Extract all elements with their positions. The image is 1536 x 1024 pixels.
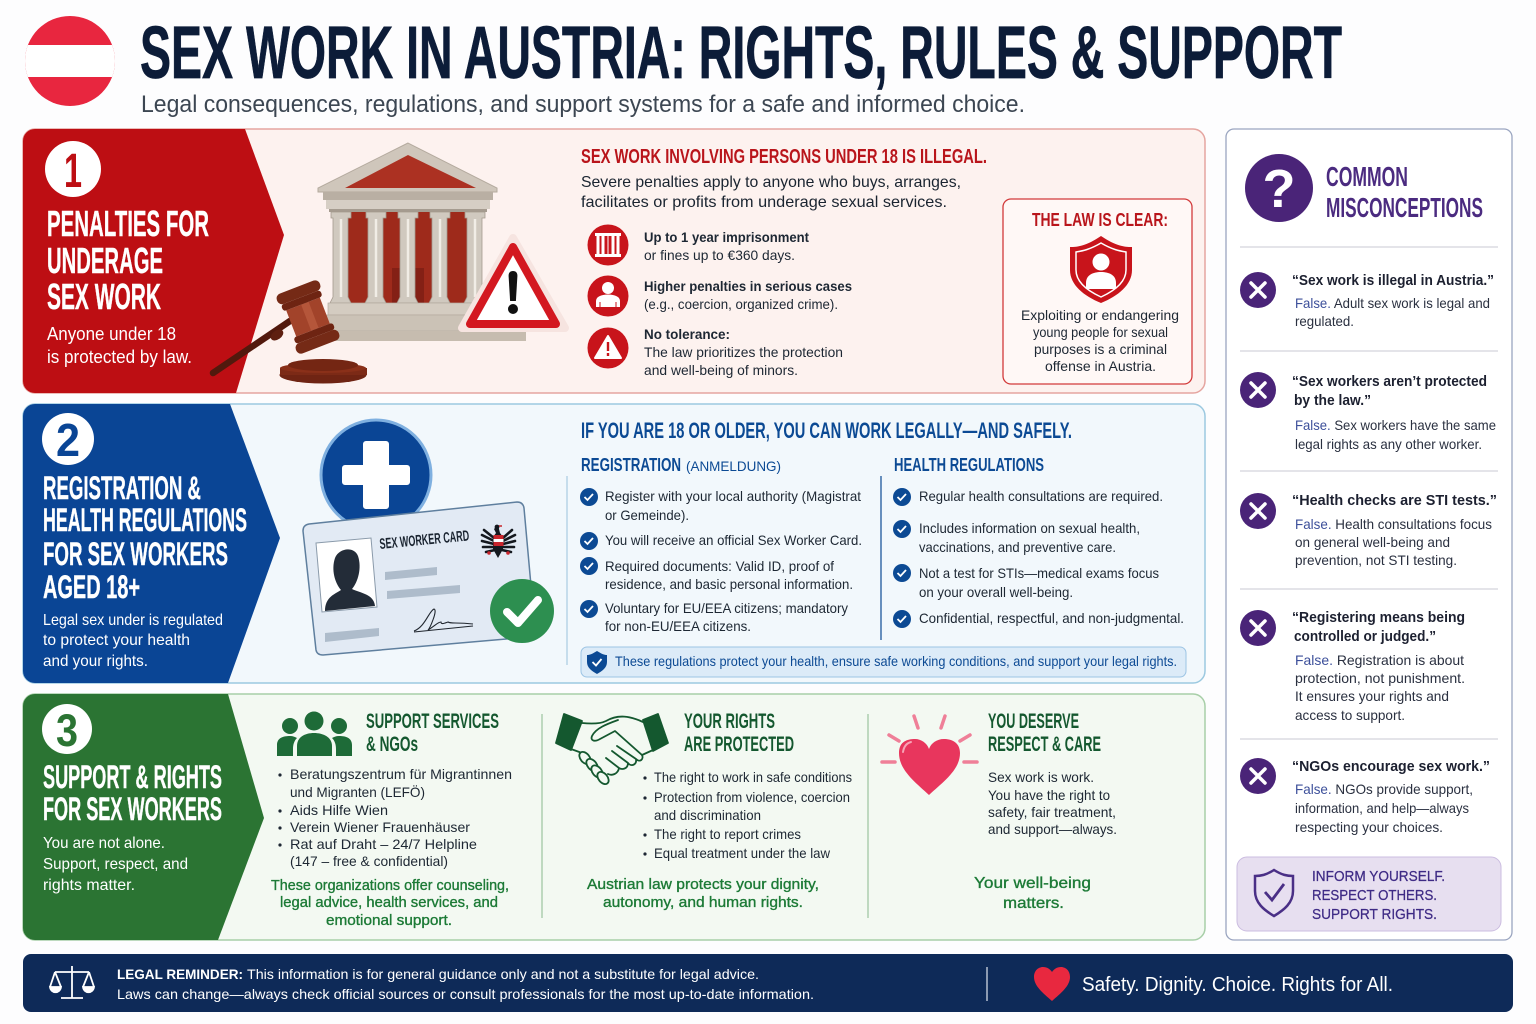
panel 3 heading: FOR SEX WORKERS bbox=[43, 791, 222, 827]
panel 1 heading: PENALTIES FOR bbox=[47, 203, 209, 244]
list: rights: The right to work in safe conditions bbox=[654, 769, 852, 785]
callout: inform yourself: SUPPORT RIGHTS. bbox=[1312, 906, 1437, 923]
respect heading: YOU DESERVE bbox=[988, 710, 1079, 733]
icon: warning triangle bbox=[462, 238, 565, 328]
legal reminder text: LEGAL REMINDER: bbox=[117, 966, 243, 982]
list: support services: Aids Hilfe Wien bbox=[290, 802, 388, 818]
list: health regulations: Regular health consultations are required. bbox=[919, 488, 1163, 504]
misconception 3 bbox=[1240, 492, 1497, 568]
list: registration: Register with your local authority (Magistrat bbox=[605, 488, 861, 504]
icon: scales of justice bbox=[50, 966, 94, 998]
support services note: legal advice, health services, and bbox=[280, 894, 498, 911]
misconception 1: regulated. bbox=[1295, 313, 1354, 329]
no tolerance text: The law prioritizes the protection bbox=[644, 344, 843, 360]
serious cases text: (e.g., coercion, organized crime). bbox=[644, 296, 838, 312]
misconception 5 bbox=[1240, 758, 1490, 835]
panel 1 subtext: is protected by law. bbox=[47, 347, 192, 367]
icon: handshake bbox=[556, 714, 668, 786]
legal reminder text: This information is for general guidance only and not a substitute for legal advice. bbox=[247, 966, 759, 982]
icon: person bbox=[588, 276, 628, 316]
illustration: courthouse bbox=[318, 143, 526, 341]
icon: gavel bbox=[213, 279, 367, 384]
respect text: Sex work is work. bbox=[988, 769, 1094, 785]
respect text: safety, fair treatment, bbox=[988, 804, 1116, 820]
legal reminder text: Laws can change—always check official sources or consult professionals for the most up-to-date information. bbox=[117, 986, 814, 1002]
list: registration: Required documents: Valid ID, proof of bbox=[605, 558, 834, 574]
list: rights: and discrimination bbox=[654, 807, 761, 823]
icon: shield with person bbox=[1070, 236, 1132, 303]
panel 3 heading bbox=[43, 759, 222, 827]
misconceptions heading bbox=[1326, 161, 1483, 223]
list: rights: The right to report crimes bbox=[654, 826, 801, 842]
misconception 4: False. Registration is about bbox=[1295, 652, 1464, 668]
callout: the law is clear: young people for sexual bbox=[1033, 324, 1168, 340]
list: registration: for non-EU/EEA citizens. bbox=[605, 618, 751, 634]
icon: question mark bbox=[1245, 154, 1313, 222]
icon: eagle bbox=[482, 525, 515, 558]
panel: penalties for underage sex work bbox=[23, 129, 1205, 393]
underage heading: SEX WORK INVOLVING PERSONS UNDER 18 IS ILLEGAL. bbox=[581, 146, 987, 168]
callout: inform yourself: INFORM YOURSELF. bbox=[1312, 868, 1445, 885]
list: support services: Beratungszentrum für Migrantinnen bbox=[290, 766, 512, 782]
rights heading bbox=[684, 710, 794, 756]
respect heading: RESPECT & CARE bbox=[988, 733, 1101, 756]
misconception 3: False. Health consultations focus bbox=[1295, 516, 1492, 532]
panel 3 subtext bbox=[43, 835, 188, 894]
panel 2 heading: REGISTRATION & bbox=[43, 470, 201, 506]
misconception 4: protection, not punishment. bbox=[1295, 670, 1465, 686]
panel: registration and health regulations bbox=[23, 404, 1205, 683]
list: rights bbox=[643, 769, 852, 861]
list: health regulations: on your overall well-being. bbox=[919, 584, 1073, 600]
list: rights: Equal treatment under the law bbox=[654, 845, 831, 861]
misconception 5: respecting your choices. bbox=[1295, 819, 1443, 835]
misconception 2 bbox=[1240, 372, 1496, 452]
misconception 2: legal rights as any other worker. bbox=[1295, 436, 1482, 452]
list: health regulations: HEALTH REGULATIONS bbox=[894, 455, 1044, 475]
panel: support and rights bbox=[23, 694, 1205, 940]
support services heading: & NGOs bbox=[366, 733, 418, 756]
underage intro text: Severe penalties apply to anyone who buys, arranges, bbox=[581, 174, 961, 191]
misconception 4: controlled or judged.” bbox=[1294, 628, 1436, 645]
number badge 3: 3 bbox=[56, 705, 78, 756]
list: registration: residence, and basic personal information. bbox=[605, 576, 853, 592]
signature bbox=[414, 609, 473, 632]
imprisonment penalty text: Up to 1 year imprisonment bbox=[644, 229, 809, 245]
misconception 3: on general well-being and bbox=[1295, 534, 1450, 550]
number badge 1: 1 bbox=[64, 145, 82, 198]
list: registration bbox=[567, 455, 862, 665]
list: registration: Voluntary for EU/EEA citizens; mandatory bbox=[605, 600, 848, 616]
misconception 2: False. Sex workers have the same bbox=[1295, 417, 1496, 433]
support services note bbox=[271, 877, 509, 929]
icon: alert triangle bbox=[588, 328, 628, 368]
underage intro text bbox=[581, 174, 961, 211]
list: health regulations: Confidential, respectful, and non-judgmental. bbox=[919, 610, 1184, 626]
panel 1 subtext bbox=[47, 324, 192, 367]
callout: the law is clear: Exploiting or endangering bbox=[1021, 307, 1179, 323]
callout: the law is clear: offense in Austria. bbox=[1045, 358, 1156, 374]
illustration: sex worker card bbox=[303, 502, 535, 655]
panel 2 heading: AGED 18+ bbox=[43, 569, 140, 605]
respect text bbox=[988, 769, 1117, 837]
misconception 5: False. NGOs provide support, bbox=[1295, 781, 1473, 797]
respect text: You have the right to bbox=[988, 787, 1110, 803]
panel: common misconceptions bbox=[1226, 129, 1512, 940]
card title: SEX WORKER CARD bbox=[379, 527, 470, 553]
panel 3 heading: SUPPORT & RIGHTS bbox=[43, 759, 222, 795]
misconception 3: “Health checks are STI tests.” bbox=[1292, 492, 1497, 509]
number badge 2 bbox=[42, 413, 94, 466]
respect note: Your well-being bbox=[974, 875, 1091, 892]
panel 3 subtext: Support, respect, and bbox=[43, 856, 188, 873]
misconception 4: access to support. bbox=[1295, 707, 1405, 723]
support services heading: SUPPORT SERVICES bbox=[366, 710, 499, 733]
callout: regulations protect: These regulations protect your health, ensure safe working conditions, and support your legal rights. bbox=[615, 653, 1177, 669]
legal reminder text bbox=[117, 966, 814, 1002]
number badge 3 bbox=[42, 704, 92, 756]
no tolerance text bbox=[644, 326, 843, 378]
respect note bbox=[974, 875, 1091, 912]
icon: heart with rays bbox=[882, 716, 977, 795]
panel 2 heading bbox=[43, 470, 247, 605]
panel 2 subtext bbox=[43, 612, 223, 670]
number badge 1 bbox=[45, 141, 101, 198]
panel 3 subtext: rights matter. bbox=[43, 877, 135, 894]
callout: inform yourself: RESPECT OTHERS. bbox=[1312, 887, 1437, 904]
closing slogan: Safety. Dignity. Choice. Rights for All. bbox=[1082, 974, 1393, 996]
callout: inform yourself bbox=[1237, 857, 1501, 931]
panel 2 subtext: and your rights. bbox=[43, 653, 148, 670]
icon: green check bbox=[490, 579, 554, 643]
panel 1 heading bbox=[47, 203, 209, 317]
blue banner shape bbox=[23, 404, 280, 683]
icon: red heart bbox=[1034, 967, 1070, 1001]
callout: regulations protect bbox=[581, 647, 1186, 677]
number badge 2: 2 bbox=[56, 414, 80, 466]
callout: the law is clear: THE LAW IS CLEAR: bbox=[1032, 210, 1168, 230]
serious cases text bbox=[644, 278, 852, 312]
misconceptions heading: COMMON bbox=[1326, 161, 1408, 192]
misconception 1: False. Adult sex work is legal and bbox=[1295, 295, 1490, 311]
list: health regulations: Not a test for STIs—medical exams focus bbox=[919, 565, 1159, 581]
rights heading: YOUR RIGHTS bbox=[684, 710, 775, 733]
callout: the law is clear: purposes is a criminal bbox=[1034, 341, 1167, 357]
rights note: Austrian law protects your dignity, bbox=[587, 876, 819, 893]
misconception 5: “NGOs encourage sex work.” bbox=[1292, 758, 1490, 775]
panel 1 heading: SEX WORK bbox=[47, 276, 161, 317]
misconception 2: by the law.” bbox=[1294, 392, 1371, 409]
misconception 1: “Sex work is illegal in Austria.” bbox=[1292, 272, 1494, 289]
green banner shape bbox=[23, 694, 264, 940]
support services heading bbox=[366, 710, 499, 756]
imprisonment penalty text bbox=[644, 229, 809, 263]
panel 3 subtext: You are not alone. bbox=[43, 835, 165, 852]
underage intro text: facilitates or profits from underage sexual services. bbox=[581, 194, 947, 211]
misconception 4: “Registering means being bbox=[1292, 609, 1465, 626]
panel 2 subtext: to protect your health bbox=[43, 632, 190, 649]
list: support services: Rat auf Draht – 24/7 Helpline bbox=[290, 836, 477, 852]
panel 1 subtext: Anyone under 18 bbox=[47, 324, 176, 344]
list: health regulations bbox=[881, 455, 1184, 640]
list: support services: (147 – free & confidential) bbox=[290, 853, 448, 869]
support services note: emotional support. bbox=[326, 912, 452, 929]
red banner shape bbox=[23, 129, 284, 393]
list: support services: und Migranten (LEFÖ) bbox=[290, 783, 425, 800]
imprisonment penalty text: or fines up to €360 days. bbox=[644, 247, 795, 263]
respect heading bbox=[988, 710, 1101, 756]
support services note: These organizations offer counseling, bbox=[271, 877, 509, 894]
list: registration: You will receive an official Sex Worker Card. bbox=[605, 532, 862, 548]
misconception 3: prevention, not STI testing. bbox=[1295, 552, 1457, 568]
callout: the law is clear bbox=[1003, 199, 1192, 384]
rights heading: ARE PROTECTED bbox=[684, 733, 794, 756]
registration heading: IF YOU ARE 18 OR OLDER, YOU CAN WORK LEGALLY—AND SAFELY. bbox=[581, 418, 1072, 443]
misconception 4: It ensures your rights and bbox=[1295, 688, 1449, 704]
list: rights: Protection from violence, coercion bbox=[654, 789, 850, 805]
rights note bbox=[587, 876, 819, 911]
panel 2 heading: HEALTH REGULATIONS bbox=[43, 502, 247, 538]
list: registration: (ANMELDUNG) bbox=[686, 458, 781, 474]
list: health regulations: vaccinations, and preventive care. bbox=[919, 539, 1116, 555]
panel 2 heading: FOR SEX WORKERS bbox=[43, 536, 228, 572]
panel 1 heading: UNDERAGE bbox=[47, 240, 163, 281]
list: health regulations: Includes information on sexual health, bbox=[919, 520, 1140, 536]
subtitle: Legal consequences, regulations, and support systems for a safe and informed choice. bbox=[141, 91, 1025, 118]
list: registration: or Gemeinde). bbox=[605, 507, 689, 523]
misconception 5: information, and help—always bbox=[1295, 800, 1469, 816]
icon: medical cross bbox=[321, 420, 431, 530]
icon: people group bbox=[277, 712, 352, 756]
respect note: matters. bbox=[1003, 895, 1064, 912]
icon: question mark: ? bbox=[1262, 159, 1296, 219]
icon: prison bars bbox=[588, 224, 628, 266]
list: registration: REGISTRATION bbox=[581, 455, 681, 475]
photo bbox=[316, 538, 377, 612]
misconception 2: “Sex workers aren’t protected bbox=[1292, 373, 1487, 390]
icon: Austrian flag bbox=[25, 16, 115, 106]
list: support services: Verein Wiener Frauenhäuser bbox=[290, 819, 470, 835]
no tolerance text: and well-being of minors. bbox=[644, 362, 798, 378]
serious cases text: Higher penalties in serious cases bbox=[644, 278, 852, 294]
misconception 1 bbox=[1240, 272, 1494, 329]
rights note: autonomy, and human rights. bbox=[603, 894, 803, 911]
panel 2 subtext: Legal sex under is regulated bbox=[43, 612, 223, 629]
no tolerance text: No tolerance: bbox=[644, 326, 730, 342]
respect text: and support—always. bbox=[988, 821, 1117, 837]
list: support services bbox=[278, 766, 512, 869]
card data lines bbox=[325, 567, 460, 642]
footer: legal reminder bbox=[23, 954, 1513, 1012]
misconception 4 bbox=[1240, 609, 1465, 723]
